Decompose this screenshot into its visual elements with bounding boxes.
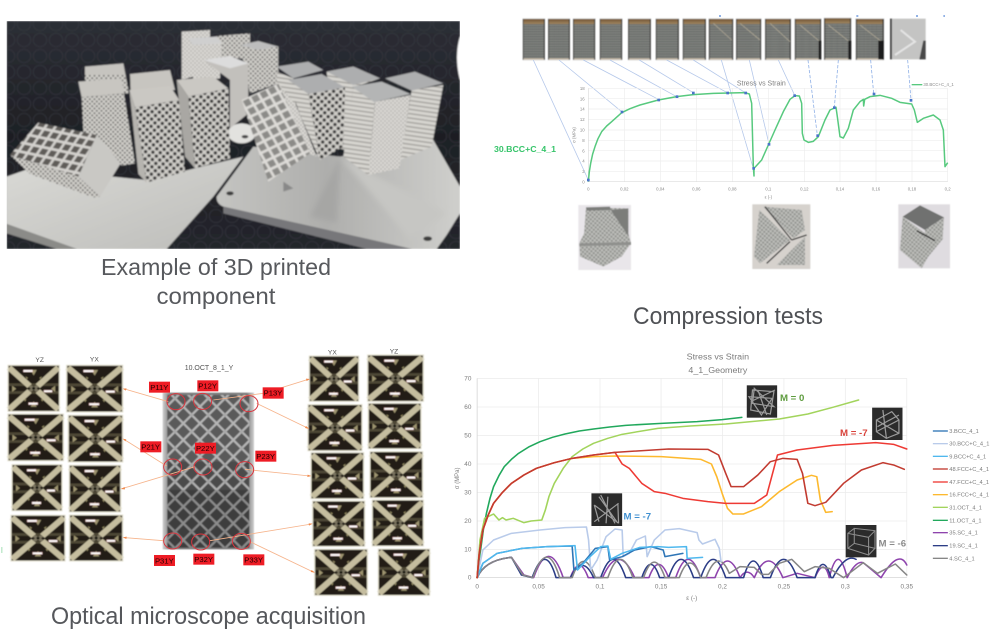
chart grid and axes: 70	[464, 376, 472, 382]
chart title: 4_1_Geometry	[688, 365, 748, 375]
chart grid and axes: 20	[464, 518, 472, 525]
chart title: Stress vs Strain	[687, 352, 749, 362]
measurement circles	[164, 393, 258, 550]
line chart: stress vs strain 30.BCC+C_4_1: Stress vs Strain	[737, 81, 786, 88]
line chart: stress vs strain 30.BCC+C_4_1: 0,08	[728, 187, 737, 192]
right blocks	[276, 72, 297, 106]
point labels: P22Y	[196, 444, 215, 453]
point labels: P13Y	[264, 389, 282, 398]
icon: octet unit cell with M = 0	[747, 385, 804, 418]
line chart: stress vs strain 30.BCC+C_4_1: 16	[580, 96, 585, 101]
point labels: P23Y	[256, 452, 275, 461]
photo: failed specimen 1	[578, 205, 631, 270]
chart grid and axes	[454, 376, 914, 602]
chart grid and axes: 0	[475, 584, 479, 591]
point labels: P11Y	[150, 383, 168, 392]
microscope images: left columns	[8, 365, 123, 561]
chart grid and axes: 0,2	[718, 584, 728, 591]
point labels	[140, 380, 284, 566]
chart grid and axes: 0,05	[532, 584, 545, 591]
legend	[933, 429, 989, 562]
line chart: stress vs strain 30.BCC+C_4_1: 0	[587, 187, 590, 192]
chart grid and axes: 50	[464, 433, 472, 439]
icon: FCC+C unit cell with M = -7: M = -7	[840, 428, 868, 438]
point labels: P12Y	[198, 382, 217, 391]
point labels: P31Y	[155, 556, 174, 565]
photo: failed specimen 3	[898, 204, 950, 268]
icon: simple cubic unit cell with M = -6	[846, 525, 906, 557]
chart grid and axes: 0	[468, 575, 472, 582]
line chart: stress vs strain 30.BCC+C_4_1: 4	[582, 159, 585, 164]
chart grid and axes: 0,3	[841, 584, 850, 591]
line chart: stress vs strain 30.BCC+C_4_1: 0,12	[800, 187, 809, 192]
chart title	[687, 352, 749, 375]
column labels	[35, 349, 398, 364]
chart grid and axes: 10	[464, 547, 472, 553]
image strip: specimen frames during compression	[523, 18, 926, 60]
legend: 9.BCC+C_4_1	[949, 454, 986, 460]
legend: 35.SC_4_1	[949, 531, 978, 537]
legend: 16.FCC+C_4_1	[949, 493, 989, 499]
line chart: stress vs strain 30.BCC+C_4_1: 0,14	[836, 187, 845, 192]
specimen: octet lattice column	[163, 393, 254, 549]
icon: FCC+C unit cell with M = -7	[840, 408, 902, 440]
legend: 4.SC_4_1	[949, 556, 975, 562]
orange arrows	[121, 379, 315, 573]
line chart: stress vs strain 30.BCC+C_4_1: 0,04	[656, 187, 665, 192]
chart grid and axes: 0,15	[655, 584, 668, 591]
panel: optical microscope acquisition	[1, 349, 430, 595]
tilted block A	[10, 155, 100, 197]
label: specimen name: 30.BCC+C_4_1	[494, 144, 556, 154]
icon: BCC+C unit cell with M = -7: M = -7	[624, 512, 651, 521]
heading: Example of 3D printed component: component	[156, 283, 276, 309]
legend: 30.BCC+C_4_1	[949, 442, 989, 448]
panel: compression tests	[494, 15, 954, 270]
chart grid and axes: 0,35	[901, 584, 914, 591]
block E	[129, 86, 179, 107]
line chart: stress vs strain 30.BCC+C_4_1: 0,06	[692, 187, 701, 192]
legend: 31.OCT_4_1	[949, 505, 982, 511]
legend: 3.BCC_4_1	[949, 429, 979, 435]
line chart: stress vs strain 30.BCC+C_4_1: 18	[580, 86, 585, 91]
tilted block H	[278, 83, 317, 157]
heading: Example of 3D printed component: Example of 3D printed	[101, 254, 331, 280]
line chart: stress vs strain 30.BCC+C_4_1: 10	[580, 128, 585, 133]
legend: 47.FCC+C_4_1	[949, 480, 989, 486]
column labels: YX	[90, 357, 99, 364]
point labels: P33Y	[244, 556, 263, 565]
back blocks	[182, 30, 210, 80]
chart grid and axes: ε (-)	[686, 595, 697, 602]
block F	[177, 77, 228, 97]
chart grid and axes: 30	[464, 490, 472, 496]
chart grid and axes: σ (MPa)	[454, 467, 461, 489]
point labels: P32Y	[194, 555, 213, 564]
line chart: stress vs strain 30.BCC+C_4_1: 8	[582, 138, 585, 143]
connector lines: frames to curve points	[533, 60, 911, 180]
icon: octet unit cell with M = 0: M = 0	[780, 393, 804, 403]
data curves	[477, 400, 907, 578]
column labels: YX	[328, 350, 337, 357]
heading: Compression tests: Compression tests	[633, 303, 823, 330]
panel: 3D printed component photo	[7, 21, 460, 249]
line chart: stress vs strain 30.BCC+C_4_1: 2	[582, 169, 585, 174]
line chart: stress vs strain 30.BCC+C_4_1: 0,18	[908, 187, 917, 192]
legend: 11.OCT_4_1	[949, 518, 982, 524]
column labels: YZ	[390, 349, 398, 356]
chart grid and axes: 60	[464, 404, 472, 411]
icon: simple cubic unit cell with M = -6: M = -6	[879, 539, 906, 549]
line chart: stress vs strain 30.BCC+C_4_1: 0,02	[620, 187, 629, 192]
line chart: stress vs strain 30.BCC+C_4_1: σ (MPa)	[572, 127, 577, 143]
chart grid and axes: 0,1	[596, 584, 605, 591]
column labels: YZ	[35, 357, 44, 364]
heading: Example of 3D printed component	[101, 254, 331, 309]
photo: failed specimen 2	[752, 204, 810, 269]
heading: Optical microscope acquisition: Optical microscope acquisition	[51, 603, 366, 630]
line chart: stress vs strain 30.BCC+C_4_1: 0,2	[945, 187, 951, 192]
chart grid and axes: 0,25	[778, 584, 791, 591]
line chart: stress vs strain 30.BCC+C_4_1	[572, 81, 954, 200]
line chart: stress vs strain 30.BCC+C_4_1: 0,16	[872, 187, 881, 192]
microscope images: right columns	[308, 355, 430, 595]
line chart: stress vs strain 30.BCC+C_4_1: 12	[580, 117, 585, 122]
legend: 48.FCC+C_4_1	[949, 467, 989, 473]
line chart: stress vs strain 30.BCC+C_4_1: ε (-)	[765, 195, 773, 200]
specimen title: 10.OCT_8_1_Y	[185, 365, 234, 372]
point labels: P21Y	[141, 443, 160, 452]
line chart: stress vs strain 30.BCC+C_4_1: 0,1	[765, 187, 772, 192]
chart grid and axes: 40	[464, 461, 472, 468]
icon: BCC+C unit cell with M = -7	[591, 493, 651, 526]
legend: 19.SC_4_1	[949, 544, 978, 550]
line chart: stress vs strain 30.BCC+C_4_1: 30.BCC+C_4_1	[923, 82, 954, 87]
panel: stress vs strain comparison chart	[454, 352, 989, 602]
line chart: stress vs strain 30.BCC+C_4_1: 0	[582, 179, 585, 184]
line chart: stress vs strain 30.BCC+C_4_1: 6	[582, 148, 585, 153]
block B	[78, 78, 124, 97]
line chart: stress vs strain 30.BCC+C_4_1: 14	[580, 107, 585, 112]
marker specks above the strip	[719, 15, 945, 17]
